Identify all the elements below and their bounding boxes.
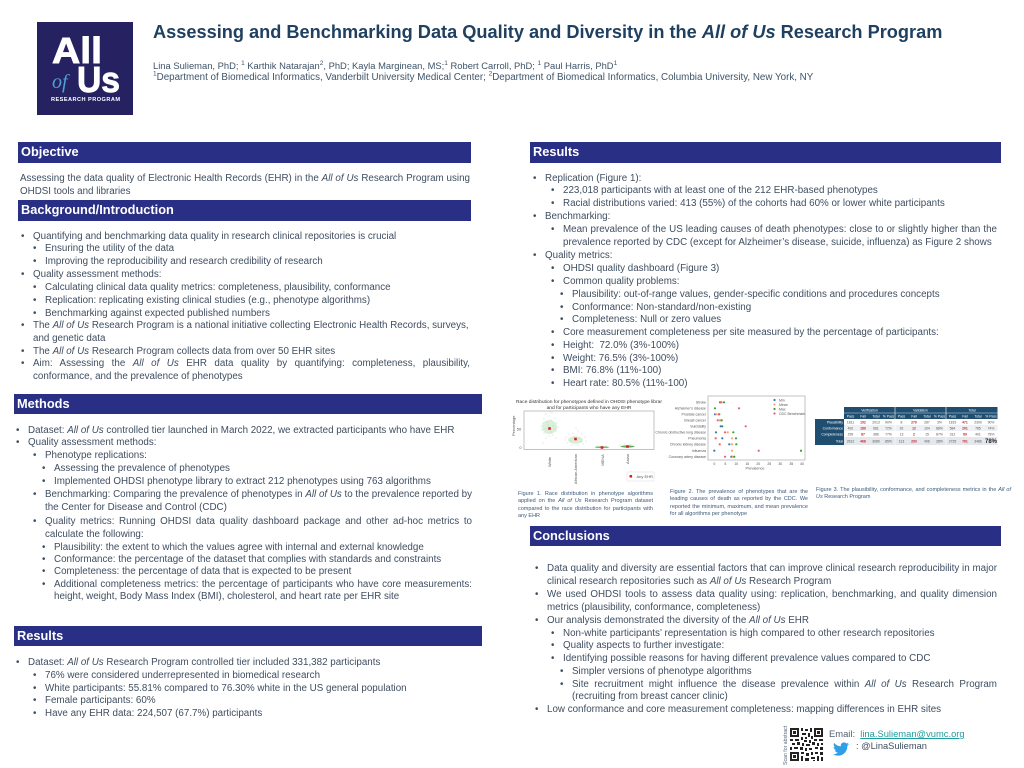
chart: Figure 2 prevalence dot plot: Chronic kidney disease [670,443,706,447]
chart: Figure 1 race distribution scatter: 0 [519,445,522,450]
text block: methods bullets: • [33,516,36,527]
text block: conclusions bullets: Simpler versions of phenotype algorithms [572,666,752,677]
text block: background bullets: • [21,358,24,369]
text block: methods bullets: Quality assessment methods: [28,437,157,448]
text block: background bullets: Calculating clinical data quality metrics: completeness, plausibility, conformance [45,282,391,293]
chart: Figure 1 race distribution scatter: Race distribution for phenotypes defined in OHDSI phenotype librar [516,399,662,405]
text block: conclusions bullets: • [551,628,554,639]
chart: Figure 2 prevalence dot plot: 15 [745,462,749,466]
text block: results bullets: • [560,302,563,313]
logo: All of Us Research Program [37,22,133,115]
text block: results dataset bullets: Dataset: All of Us Research Program controlled tier included 331,382 participants [28,657,380,668]
caption: Figure 2 [670,489,808,517]
table: Figure 3 quality metrics: 90% [885,420,892,424]
caption: Figure 3 [816,487,1012,500]
text block: results bullets: BMI: 76.8% (11%-100) [563,365,661,376]
table: Figure 3 quality metrics: 90% [988,420,994,424]
text block: conclusions bullets: Quality aspects to further investigate: [563,640,724,651]
chart: Figure 2 prevalence dot plot: 25 [767,462,771,466]
table: Figure 3 quality metrics: 2013 [872,420,880,424]
text block: results bullets: • [551,198,554,209]
table: Figure 3 quality metrics: 761 [962,439,968,443]
table: Figure 3 quality metrics: 13 [900,432,903,436]
text block: background bullets: • [21,346,24,357]
text block: methods bullets: • [16,437,19,448]
text block: methods bullets: height, weight, Body Mass Index (BMI), cholesterol, and heart rate per EHR site [54,591,399,602]
text block: background bullets [21,231,470,382]
icon: QR code [790,728,823,761]
text block: conclusions bullets: clinical research repositories such as All of Us Research Program [547,576,831,587]
text block: methods bullets: • [33,450,36,461]
table: Figure 3 quality metrics: 2612 [847,439,854,443]
text block: methods bullets: Assessing the prevalence of phenotypes [54,463,230,474]
table: Figure 3 quality metrics: Pass [898,414,906,418]
text block: conclusions bullets: Data quality and diversity are essential factors that can improve clinical research reproducibility in major [547,563,997,574]
text block: conclusions bullets [535,563,997,715]
label: scan for abstract: Scan for abstract [783,725,789,765]
chart: Figure 2 prevalence dot plot: Min [779,398,785,402]
text block: methods bullets: • [42,554,45,565]
text block: methods bullets: • [42,463,45,474]
panel heading: Methods [14,394,482,414]
text block: results dataset bullets: White participants: 55.81% compared to 76.30% white in the US general population [45,683,407,694]
text block: results bullets: • [551,365,554,376]
panel heading: Background/Introduction: Background/Introduction [21,202,174,217]
text block: conclusions bullets: • [560,679,563,690]
table: Figure 3 quality metrics: 1819 [949,420,956,424]
text block: conclusions bullets: Non-white participants’ representation is high compared to other research repositories [563,628,935,639]
caption: Figure 3: Figure 3. The plausibility, conformance, and completeness metrics in the All of [816,487,1011,493]
table: Figure 3 quality metrics: 78% [985,439,998,445]
table: Figure 3 quality metrics: % Pass [934,414,946,418]
text block: results bullets: Benchmarking: [545,211,610,222]
text block: results dataset bullets: • [16,657,19,668]
authors and affiliations: 1Department of Biomedical Informatics, Vanderbilt University Medical Center; 2Department of Biomedical Informatics, Columbia University, New York, NY [153,71,813,83]
table: Figure 3 quality metrics: 386 [873,432,879,436]
table: Figure 3 quality metrics: 85% [885,439,892,443]
table: Figure 3 quality metrics: Conformance [823,426,843,430]
table: Figure 3 quality metrics: 92 [900,426,903,430]
table: Figure 3 quality metrics: 3486 [974,439,982,443]
chart: Figure 2 prevalence dot plot: Alzheimer’s disease [675,407,706,411]
chart: Figure 1 race distribution scatter: and for participants who have any EHR [547,405,632,411]
table: Figure 3 quality metrics: 293 [911,439,917,443]
text block: results bullets: Racial distributions varied: 413 (55%) of the cohorts had 60% or lower white participants [563,198,945,209]
text block: conclusions bullets: • [560,666,563,677]
text block: results bullets: • [551,327,554,338]
table: Figure 3 quality metrics: 279 [911,420,917,424]
chart: Figure 1 race distribution scatter: White [547,456,552,467]
text block: conclusions bullets: metrics (plausibility, conformance, completeness) [547,602,760,613]
table: Figure 3 quality metrics: 406 [924,439,930,443]
authors and affiliations [153,60,813,83]
caption: Figure 1: compared to the race distribution for participants with [518,506,653,512]
text block: methods bullets: Dataset: All of Us controlled tier launched in March 2022, we extracted participants who have EHR [28,425,454,436]
table: Figure 3 quality metrics: % Pass [985,414,997,418]
table: Figure 3 quality metrics: 88% [936,426,943,430]
panel heading: Results (right) [530,142,1001,163]
table: Figure 3 quality metrics: 312 [950,432,955,436]
caption: Figure 1: any EHR [518,513,540,519]
chart: Figure 2 prevalence dot plot: 20 [756,462,760,466]
table: Figure 3 quality metrics: Total [968,408,976,412]
table: Figure 3 quality metrics: 8 [901,420,903,424]
text block: background bullets: Improving the reproducibility and research credibility of research [45,256,323,267]
text block: methods bullets: Benchmarking: Comparing the prevalence of phenotypes in All of Us to the prevalence reported by [45,489,472,500]
table: Figure 3 quality metrics: 12 [912,426,916,430]
table: Figure 3 quality metrics: 192 [860,420,866,424]
icon: Twitter bird [833,742,849,756]
table: Figure 3 quality metrics: Pass [949,414,957,418]
text block: objective: OHDSI tools and libraries [20,186,131,197]
chart: Figure 1 race distribution scatter: Any EHR [636,474,653,479]
table: Figure 3 quality metrics: 113 [899,439,904,443]
contact: twitter handle: : @LinaSulieman [856,741,927,751]
text block: conclusions bullets: Site recruitment might influence the disease prevalence within All of Us Research Program [572,679,997,690]
table: Figure 3 quality metrics: Pass [847,414,855,418]
table: Figure 3 quality metrics: 2300 [974,420,982,424]
text block: conclusions bullets: • [551,640,554,651]
text block: results dataset bullets: 76% were considered underrepresented in biomedical research [45,670,320,681]
panel heading: Conclusions: Conclusions [533,528,610,543]
table: Figure 3 quality metrics: Total [872,414,880,418]
text block: background bullets: The All of Us Research Program is a national initiative collecting Electronic Health Records, surveys, [33,320,469,331]
text block: conclusions bullets: • [535,704,538,715]
text block: results bullets: • [533,211,536,222]
panel heading: Objective [18,142,471,163]
text block: results bullets: • [560,314,563,325]
table: Figure 3 quality metrics: 189 [860,426,866,430]
text block: methods bullets: Quality metrics: Running OHDSI data quality dashboard package and other ad-hoc metrics to [45,516,472,527]
text block: results bullets: OHDSI quality dashboard (Figure 3) [563,263,719,274]
text block: results bullets: • [551,340,554,351]
text block: results bullets: Plausibility: out-of-range values, gender-specific conditions and procedures concepts [572,289,940,300]
table: Figure 3 quality metrics: 89 [963,432,967,436]
table: Figure 3 quality metrics: 15 [925,432,929,436]
text block: results dataset bullets [16,657,407,719]
text block: results bullets: Mean prevalence of the US leading causes of death phenotypes: close to or slightly higher than the [563,224,997,235]
logo: All of Us Research Program: All [52,30,102,71]
chart: Figure 2 prevalence dot plot: Breast cancer [684,419,707,423]
text block: results dataset bullets: Female participants: 60% [45,695,156,706]
panel heading: Results (left): Results [17,628,63,643]
text block: methods bullets: • [42,579,45,590]
text block: background bullets: Replication: replicating existing clinical studies (e.g., phenotype algorithms) [45,295,370,306]
text block: background bullets: • [21,269,24,280]
chart: Figure 2 prevalence dot plot: Pneumonia [688,437,706,441]
chart: Figure 2 prevalence dot plot: 5 [724,462,726,466]
text block: results bullets: • [551,185,554,196]
table: Figure 3 quality metrics: 468 [860,439,866,443]
caption: Figure 2: leading causes of death as reported by the CDC. We [670,496,808,502]
text block: methods bullets: • [16,425,19,436]
text block: results bullets: • [560,289,563,300]
chart: Figure 1 race distribution scatter: Asian [625,454,630,464]
caption: Figure 1 [518,491,653,519]
text block: background bullets: conformance, and the prevalence of phenotypes [33,371,243,382]
text block: background bullets: • [21,231,24,242]
text block: objective: Assessing the data quality of Electronic Health Records (EHR) in the All of Us Research Program using [20,173,470,184]
text block: methods bullets: • [42,476,45,487]
text block: methods bullets: Completeness: the percentage of data that is expected to be present [54,566,351,577]
table: Figure 3 quality metrics: 584 [950,426,955,430]
chart: Figure 2 prevalence dot plot: Prostate cancer [681,413,707,417]
table: Figure 3 quality metrics: 87% [936,432,943,436]
logo: All of Us Research Program: Us [77,59,120,100]
text block: results bullets: 223,018 participants with at least one of the 212 EHR-based phenotypes [563,185,878,196]
text block: results bullets: • [533,173,536,184]
panel heading: Methods: Methods [17,396,70,411]
table: Figure 3 quality metrics: % Pass [883,414,895,418]
caption: Figure 1: applied on the All of Us Research Program dataset [518,498,653,504]
text block: background bullets: • [33,308,36,319]
table: Figure 3 quality metrics: 72% [885,426,892,430]
panel heading: Conclusions [530,526,1001,546]
text block: methods bullets: Additional completeness metrics: the percentage of participants who have core measurements: [54,579,472,590]
logo: All of Us Research Program: of [52,71,70,93]
text block: objective [20,173,470,197]
table: Figure 3 quality metrics: 2 [913,432,915,436]
text block: results dataset bullets: • [33,708,36,719]
table: Figure 3 quality metrics: Fail [860,414,866,418]
caption: Figure 2: for all algorithms per phenotype [670,511,747,517]
text block: methods bullets: Phenotype replications: [45,450,147,461]
table: Figure 3 quality metrics [815,407,998,445]
chart: Figure 2 prevalence dot plot: Influenza [692,449,706,453]
panel heading: Background/Introduction [18,200,471,221]
text block: results bullets: • [551,378,554,389]
table: Figure 3 quality metrics: 401 [975,432,981,436]
text block: background bullets: Benchmarking against expected published numbers [45,308,270,319]
table: Figure 3 quality metrics: Completeness [821,432,843,436]
text block: methods bullets [16,425,472,602]
panel heading: Objective: Objective [21,144,79,159]
caption: Figure 2: reported the minimum, maximum, and mean prevalence [670,504,808,510]
chart: Figure 2 prevalence dot plot: Prevalence [746,466,764,470]
title: Assessing and Benchmarking Data Quality and Diversity in the All of Us Research Program [153,22,942,42]
table: Figure 3 quality metrics: Validation [913,408,928,412]
chart: Figure 2 prevalence dot plot: 0 [713,462,715,466]
chart: Figure 2 prevalence dot plot: Chronic obstructive lung disease [655,431,706,435]
table: Figure 3 quality metrics: 471 [962,420,968,424]
contact: email: Email: lina.Sulieman@vumc.org [829,728,965,739]
table: Figure 3 quality metrics: 785 [975,426,981,430]
text block: results bullets: Heart rate: 80.5% (11%-100) [563,378,688,389]
table: Figure 3 quality metrics: 28% [936,439,943,443]
text block: background bullets: • [33,282,36,293]
table: Figure 3 quality metrics: 87 [861,432,865,436]
text block: results bullets: • [551,263,554,274]
chart: Figure 2 prevalence dot plot: 10 [734,462,738,466]
chart: Figure 1 race distribution scatter: Percentage [511,415,516,436]
table: Figure 3 quality metrics: 3% [937,420,942,424]
chart: Figure 2 prevalence dot plot [655,396,806,470]
text block: conclusions bullets: Low conformance and core measurement completeness: mapping differences in EHR sites [547,704,941,715]
table: Figure 3 quality metrics: 74% [988,426,994,430]
text block: background bullets: Ensuring the utility of the data [45,243,174,254]
chart: Figure 2 prevalence dot plot: Max [779,407,786,411]
text block: results bullets: Common quality problems: [563,276,680,287]
text block: methods bullets: • [42,542,45,553]
text block: results bullets: Conformance: Non-standard/non-existing [572,302,751,313]
text block: background bullets: • [21,320,24,331]
text block: results bullets: • [551,224,554,235]
chart: Figure 2 prevalence dot plot: CDC Benchmark [779,412,806,416]
text block: conclusions bullets: Our analysis demonstrated the diversity of the All of Us EHR [547,615,809,626]
text block: methods bullets: Conformance: the percentage of the dataset that complies with standards and constraints [54,554,441,565]
text block: background bullets: Quality assessment methods: [33,269,162,280]
chart: Figure 2 prevalence dot plot: Stroke [696,401,706,405]
text block: conclusions bullets: • [535,589,538,600]
text block: results dataset bullets: • [33,683,36,694]
text block: results bullets: • [551,353,554,364]
table: Figure 3 quality metrics: 78% [988,432,994,436]
authors and affiliations: Lina Sulieman, PhD; 1 Karthik Natarajan2, PhD; Kayla Marginean, MS;1 Robert Carroll, PhD; 1 Paul Harris, PhD1 [153,60,617,71]
chart: Figure 2 prevalence dot plot: 40 [800,462,804,466]
text block: results bullets: Core measurement completeness per site measured by the percentage of participants: [563,327,939,338]
text block: results dataset bullets: • [33,670,36,681]
text block: results bullets: prevalence reported by CDC (except for Alzheimer’s disease, suicide, influenza) as Figure 2 shows [563,237,992,248]
text block: background bullets: • [33,295,36,306]
text block: methods bullets: the Center for Disease and Control (CDC) [45,502,227,513]
text block: methods bullets: calculate the following: [45,529,144,540]
logo: All of Us Research Program: RESEARCH PROGRAM [51,97,120,103]
text block: results bullets: Quality metrics: [545,250,613,261]
table: Figure 3 quality metrics: 492 [848,426,853,430]
chart: Figure 1 race distribution scatter [511,399,662,484]
text block: background bullets: • [33,243,36,254]
table: Figure 3 quality metrics: 681 [873,426,879,430]
text block: methods bullets: Plausibility: the extent to which the values agree with internal and external knowledge [54,542,424,553]
chart: Figure 2 prevalence dot plot: 35 [789,462,793,466]
text block: methods bullets: • [42,566,45,577]
table: Figure 3 quality metrics: Verification [861,408,878,412]
text block: results bullets: Completeness: Null or zero values [572,314,721,325]
text block: background bullets: and genetic data [33,333,105,344]
text block: background bullets: Quantifying and benchmarking data quality in research clinical repositories is crucial [33,231,396,242]
text block: conclusions bullets: • [535,615,538,626]
table: Figure 3 quality metrics: Total [836,439,843,443]
table: Figure 3 quality metrics: Total [923,414,931,418]
table: Figure 3 quality metrics: Fail [911,414,917,418]
chart: Figure 1 race distribution scatter: 50 [517,426,522,432]
chart: Figure 2 prevalence dot plot: 30 [778,462,782,466]
table: Figure 3 quality metrics: Fail [962,414,968,418]
table: Figure 3 quality metrics: 1811 [847,420,854,424]
text block: results dataset bullets: Have any EHR data: 224,507 (67.7%) participants [45,708,262,719]
text block: conclusions bullets: (recruiting from breast cancer clinic) [572,691,728,702]
text block: results bullets [533,173,997,389]
chart: Figure 1 race distribution scatter: MENA [600,454,605,466]
table: Figure 3 quality metrics: 299 [848,432,853,436]
text block: background bullets: Aim: Assessing the All of Us EHR data quality by quantifying: completeness, plausibility, [33,358,470,369]
text block: results bullets: Height: 72.0% (3%-100%) [563,340,679,351]
text block: conclusions bullets: • [551,653,554,664]
table: Figure 3 quality metrics: Total [974,414,982,418]
table: Figure 3 quality metrics: Plausibility [827,420,843,424]
chart: Figure 2 prevalence dot plot: Mean [779,403,788,407]
table: Figure 3 quality metrics: 3080 [872,439,880,443]
text block: conclusions bullets: • [535,563,538,574]
table: Figure 3 quality metrics: 2725 [949,439,956,443]
text block: background bullets: • [33,256,36,267]
chart: Figure 2 prevalence dot plot: Coronary artery disease [669,455,706,459]
text block: methods bullets: • [33,489,36,500]
table: Figure 3 quality metrics: 77% [885,432,892,436]
caption: Figure 3: Us Research Program [816,494,870,500]
text block: methods bullets: Implemented OHDSI phenotype library to extract 212 phenotypes using 763 algorithms [54,476,431,487]
chart: Figure 1 race distribution scatter: African American [573,454,578,484]
text block: results bullets: Weight: 76.5% (3%-100%) [563,353,678,364]
text block: results bullets: • [551,276,554,287]
text block: conclusions bullets: Identifying possible reasons for having different prevalence values compared to CDC [563,653,930,664]
text block: conclusions bullets: We used OHDSI tools to assess data quality using: replication, benchmarking, and quality dimension [547,589,997,600]
caption: Figure 2: Figure 2. The prevalence of phenotypes that are the [670,489,808,495]
chart: Figure 2 prevalence dot plot: Suicidality [690,425,706,429]
table: Figure 3 quality metrics: 201 [962,426,968,430]
table: Figure 3 quality metrics: 104 [924,426,930,430]
text block: results bullets: • [533,250,536,261]
table: Figure 3 quality metrics: 287 [924,420,930,424]
text block: results bullets: Replication (Figure 1): [545,173,641,184]
text block: background bullets: The All of Us Research Program collects data from over 50 EHR sites [33,346,335,357]
panel heading: Results (right): Results [533,144,579,159]
text block: results dataset bullets: • [33,695,36,706]
panel heading: Results (left) [14,626,482,646]
caption: Figure 1: Figure 1. Race distribution in phenotype algorithms [518,491,653,497]
